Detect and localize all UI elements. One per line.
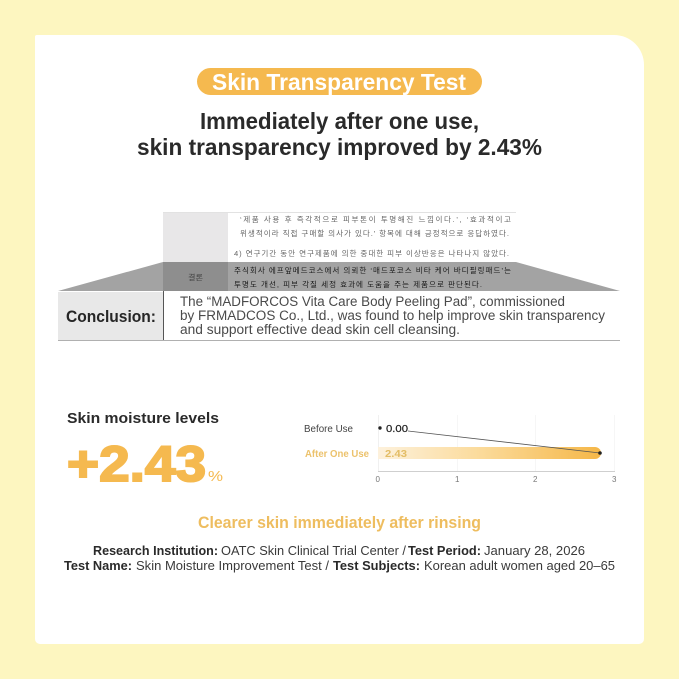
value: after: 2.43	[385, 448, 407, 460]
panel: clinical report excerpt: ‘제품 사용 후 즉각적으로 피부톤이 투명해진 느낌이다.’, ‘효과적이고	[240, 214, 511, 224]
study details	[64, 543, 615, 573]
conclusion text: by FRMADCOS Co., Ltd., was found to help improve skin transparency	[180, 308, 605, 323]
stat value: +2.43	[67, 436, 206, 492]
highlighted conclusion band: 투명도 개선, 피부 각질 세정 효과에 도움을 주는 제품으로 판단된다.	[234, 279, 482, 289]
heading	[137, 108, 542, 160]
heading: Immediately after one use,	[200, 108, 479, 134]
conclusion label: Conclusion:	[66, 308, 156, 326]
axis ticks	[376, 475, 617, 484]
panel: clinical report excerpt	[163, 212, 516, 262]
conclusion text	[180, 294, 605, 337]
study details: Research Institution:	[93, 543, 218, 558]
axis ticks: 3	[612, 475, 617, 484]
conclusion text: The “MADFORCOS Vita Care Body Peeling Pad”, commissioned	[180, 294, 565, 309]
highlighted conclusion band: 결론	[188, 272, 203, 282]
study details: Korean adult women aged 20–65	[424, 558, 615, 573]
study details: Test Period:	[408, 543, 481, 558]
value: before: 0.00	[386, 423, 408, 435]
point: before	[378, 426, 382, 430]
chart: before and after	[304, 415, 617, 484]
conclusion row	[58, 291, 620, 341]
panel: clinical report excerpt: 4) 연구기간 동안 연구제품에 의한 중대한 피부 이상반응은 나타나지 않았다.	[234, 248, 509, 258]
point: after	[598, 451, 602, 455]
subheading: Clearer skin immediately after rinsing	[198, 514, 481, 532]
study details: Test Name:	[64, 558, 132, 573]
label: before use: Before Use	[304, 424, 353, 435]
axis ticks: 0	[376, 475, 380, 484]
highlighted conclusion band: 주식회사 에프앞메드코스에서 의뢰한 ‘매드포코스 비타 케어 바디필링패드’는	[234, 265, 511, 275]
study details: OATC Skin Clinical Trial Center /	[221, 543, 406, 558]
study details: January 28, 2026	[484, 543, 585, 558]
heading: skin transparency improved by 2.43%	[137, 134, 542, 160]
bar: after one use	[378, 447, 601, 459]
study details: Test Subjects:	[333, 558, 420, 573]
stat value: %	[208, 468, 223, 485]
panel: clinical report excerpt: 위생적이라 직접 구매할 의사가 있다.’ 항목에 대해 긍정적으로 응답하였다.	[240, 228, 509, 238]
axis ticks: 1	[455, 475, 460, 484]
label: after one use: After One Use	[305, 449, 369, 460]
trend line	[408, 431, 600, 453]
highlighted conclusion band	[58, 262, 620, 291]
badge: Skin Transparency Test: Skin Transparency Test	[212, 69, 466, 95]
study details: Skin Moisture Improvement Test /	[136, 558, 329, 573]
stat heading: Skin moisture levels	[67, 410, 219, 427]
axis ticks: 2	[533, 475, 538, 484]
conclusion text: and support effective dead skin cell cleansing.	[180, 322, 460, 337]
